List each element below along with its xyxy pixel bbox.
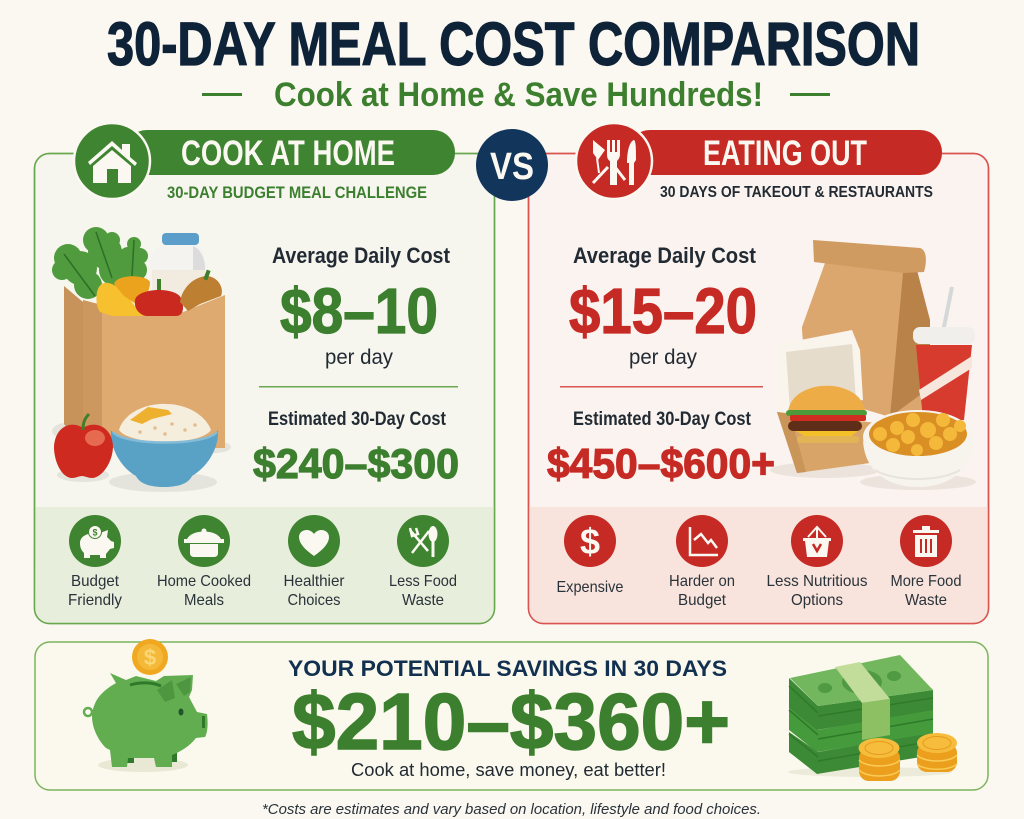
- icon: fork and knife: [593, 140, 636, 185]
- heading: eating out: EATING OUT: [703, 134, 867, 173]
- peppers: [96, 283, 143, 316]
- header: eating out: [576, 123, 942, 201]
- stat: 30-day cost: Estimated 30-Day Cost: [268, 409, 447, 430]
- stat: 30-day cost: Estimated 30-Day Cost: [573, 409, 752, 430]
- badge: vs: VS: [490, 146, 534, 188]
- footnote: *Costs are estimates and vary based on location, lifestyle and food choices.: [262, 801, 761, 818]
- benefit: budget friendly: $: [92, 528, 98, 538]
- burger: [788, 386, 865, 412]
- stat: average daily cost: $8–10: [280, 275, 438, 347]
- paper bag: [802, 263, 930, 417]
- benefit: budget friendly: [68, 515, 122, 609]
- bowl of rice: [119, 404, 211, 442]
- bag back and side: [64, 286, 83, 447]
- stat: average daily cost: Average Daily Cost: [272, 243, 451, 268]
- stat: average daily cost: per day: [629, 346, 697, 369]
- illustration: grocery bag: [52, 227, 231, 492]
- illustration: piggy bank: $: [144, 645, 156, 670]
- benefit: healthier choices: Healthier: [284, 573, 345, 590]
- heading: cook at home: COOK AT HOME: [181, 134, 395, 173]
- stat: average daily cost: per day: [325, 346, 393, 369]
- savings text: YOUR POTENTIAL SAVINGS IN 30 DAYS: [288, 656, 727, 681]
- savings text: $210–$360+: [292, 677, 730, 766]
- panel: eating out: [528, 123, 988, 624]
- benefit: home cooked meals: [157, 515, 251, 609]
- apple: [54, 425, 113, 478]
- drawback: expensive: $: [580, 521, 600, 562]
- stat: average daily cost: [272, 243, 451, 369]
- coin: [132, 639, 168, 675]
- drawback: less nutritious options: Options: [791, 592, 843, 609]
- badge: vs: [476, 129, 548, 201]
- icon: house: [88, 141, 137, 183]
- benefit: healthier choices: Choices: [288, 592, 340, 609]
- benefit: budget friendly: Budget: [71, 573, 120, 590]
- stat: average daily cost: $15–20: [569, 275, 757, 347]
- drawback: less nutritious options: [766, 515, 868, 609]
- drawback: expensive: [556, 515, 624, 596]
- burger box: [775, 330, 863, 415]
- drawback: expensive: Expensive: [556, 579, 624, 596]
- drawback: more food waste: [890, 515, 962, 609]
- drink cup: [916, 345, 972, 420]
- stat: 30-day cost: $450–$600+: [547, 440, 775, 487]
- benefit: home cooked meals: Meals: [184, 592, 224, 609]
- benefit: less food waste: Waste: [402, 592, 444, 609]
- drawback: harder on budget: Budget: [678, 592, 727, 609]
- stat: 30-day cost: $240–$300: [253, 440, 459, 487]
- stat: average daily cost: [569, 243, 757, 369]
- drawback: more food waste: More Food: [890, 573, 962, 590]
- illustration: takeout food: [770, 240, 976, 490]
- subheading: takeout: 30 DAYS OF TAKEOUT & RESTAURANTS: [660, 184, 933, 201]
- bowl of nuggets: [863, 410, 973, 464]
- benefit: less food waste: [389, 515, 457, 609]
- drawback: harder on budget: [669, 515, 735, 609]
- illustration: cash and coins: [788, 655, 957, 781]
- illustration: piggy bank: [84, 639, 208, 772]
- subtitle: Cook at Home & Save Hundreds!: [274, 76, 763, 114]
- benefit: healthier choices: [284, 515, 345, 609]
- drawback: more food waste: Waste: [905, 592, 947, 609]
- drawback: less nutritious options: Less Nutritious: [766, 573, 868, 590]
- panel: savings: [35, 639, 988, 790]
- benefit: less food waste: Less Food: [389, 573, 457, 590]
- benefit: home cooked meals: Home Cooked: [157, 573, 251, 590]
- panel: cook at home: [34, 123, 494, 624]
- lettuce: [52, 227, 148, 299]
- savings text: Cook at home, save money, eat better!: [351, 760, 666, 780]
- header: cook at home: [74, 123, 455, 202]
- drawback: harder on budget: Harder on: [669, 573, 735, 590]
- stat: 30-day cost: [253, 409, 459, 487]
- benefit: budget friendly: Friendly: [68, 592, 122, 609]
- milk jar: [150, 244, 205, 300]
- subheading: budget challenge: 30-DAY BUDGET MEAL CHALLENGE: [167, 183, 427, 202]
- stat: average daily cost: Average Daily Cost: [573, 243, 757, 268]
- gold coins: [859, 748, 900, 781]
- stat: 30-day cost: [547, 409, 775, 487]
